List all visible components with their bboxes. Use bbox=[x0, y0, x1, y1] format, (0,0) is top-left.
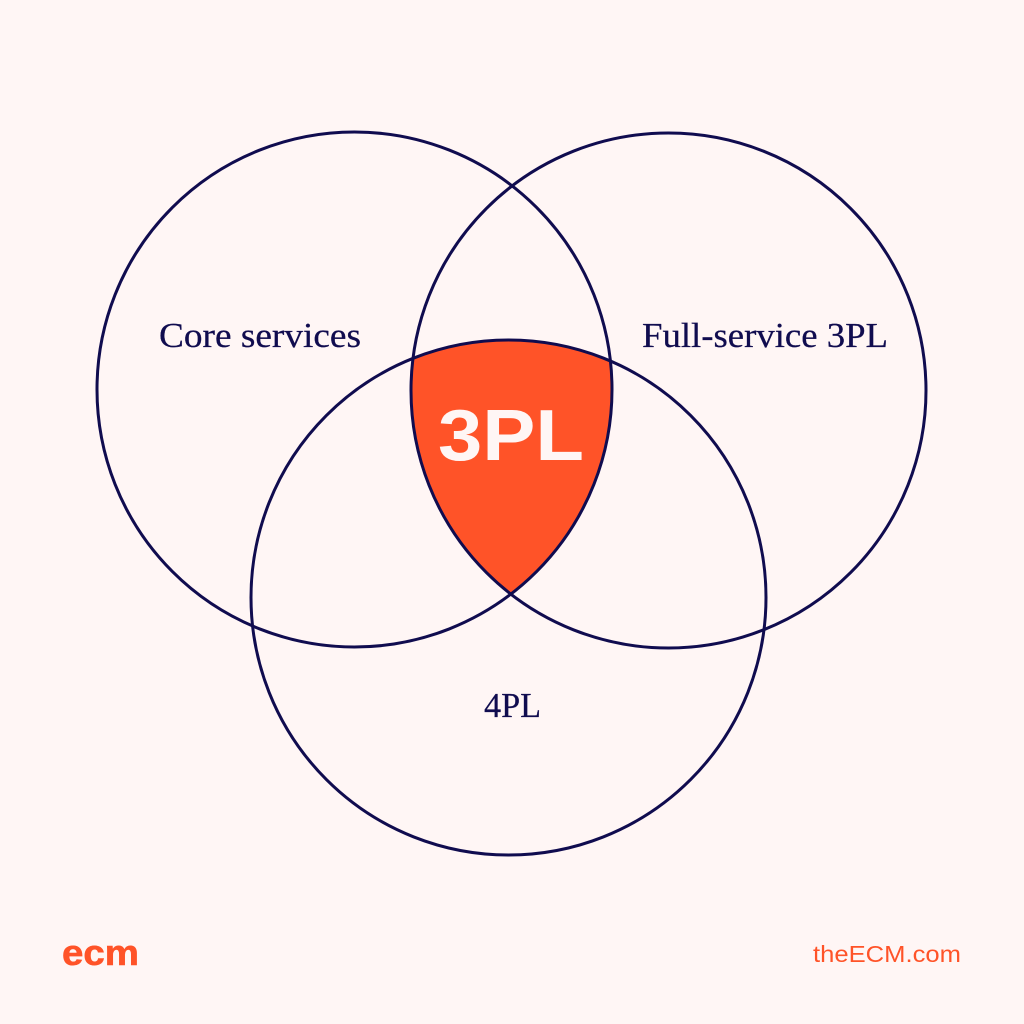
label: Full-service 3PL: Full-service 3PL bbox=[642, 316, 888, 355]
website: theECM.com: theECM.com bbox=[813, 941, 961, 967]
label: Core services: Core services bbox=[159, 316, 361, 355]
center label: 3PL: 3PL bbox=[438, 396, 584, 476]
circle: 4PL bbox=[251, 340, 766, 855]
logo: ecm: ecm bbox=[62, 932, 139, 973]
label: 4PL: 4PL bbox=[484, 686, 541, 725]
circle: core services bbox=[97, 132, 612, 647]
highlighted intersection: 3PL bbox=[412, 341, 611, 593]
circle: full-service 3PL bbox=[411, 133, 926, 648]
